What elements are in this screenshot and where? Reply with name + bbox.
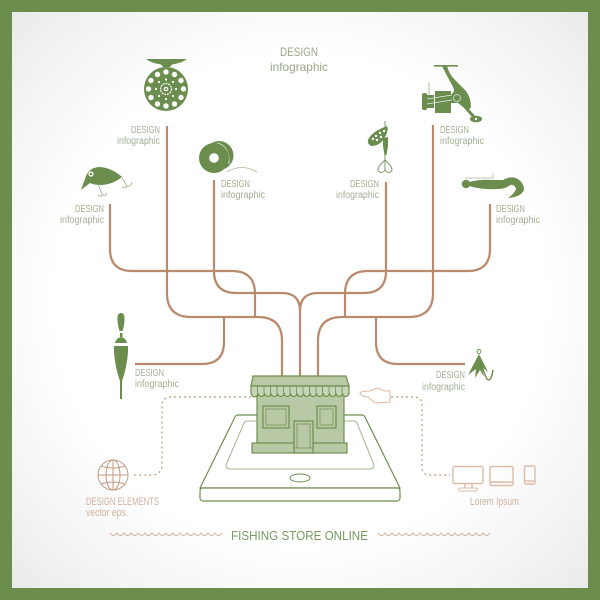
dotted connector: store to devices: [391, 397, 450, 475]
label: spinner: [336, 179, 379, 201]
icon: soft grub bait: [462, 173, 524, 198]
label: spinning reel: DESIGN: [440, 125, 469, 136]
wave divider right: [378, 533, 490, 536]
label: spinner: DESIGN: [350, 179, 379, 190]
branching connector lines: [110, 125, 490, 376]
label: design elements: vector eps.: [86, 507, 128, 519]
label: spinning reel: [440, 125, 484, 147]
label: spinner: infographic: [336, 190, 379, 201]
label: design elements: [86, 496, 159, 519]
label: lure: infographic: [60, 215, 104, 226]
label: lure: [60, 204, 104, 226]
icon: pointing hand: [360, 388, 390, 403]
label: hook: infographic: [422, 382, 465, 393]
label: lure: DESIGN: [75, 204, 104, 215]
wave divider left: [110, 533, 222, 536]
icon: fishing float: [114, 313, 128, 399]
title: design infographic: DESIGN: [280, 45, 318, 59]
label: spinning reel: infographic: [440, 136, 484, 147]
label: grub: DESIGN: [496, 204, 525, 215]
label: grub: infographic: [496, 215, 540, 226]
icon: globe: [98, 460, 128, 490]
label: grub: [496, 204, 540, 226]
icon: storefront: [251, 376, 349, 453]
icon: fly fishing reel: [144, 59, 188, 111]
label: spool: DESIGN: [221, 179, 250, 190]
label: reel: infographic: [117, 136, 160, 147]
label: hook: DESIGN: [436, 370, 465, 381]
label: design elements: DESIGN ELEMENTS: [86, 496, 159, 508]
icon: spinner lure: [368, 121, 392, 172]
title: design infographic: infographic: [270, 60, 328, 74]
label: float: [135, 368, 179, 390]
label: reel: DESIGN: [131, 125, 160, 136]
label: lorem ipsum: Lorem Ipsum: [470, 496, 519, 508]
label: float: DESIGN: [135, 368, 164, 379]
footer title: FISHING STORE ONLINE: [231, 528, 368, 543]
icon: spinning reel: [422, 65, 482, 122]
label: spool: [221, 179, 265, 201]
label: float: infographic: [135, 379, 179, 390]
icon: devices: [453, 466, 535, 491]
icon: line spool: [199, 141, 257, 173]
icon: crankbait lure: [81, 167, 132, 196]
icon: fly hook: [468, 350, 493, 380]
label: hook: [422, 370, 465, 393]
label: spool: infographic: [221, 190, 265, 201]
title: design infographic: [270, 45, 328, 74]
dotted connector: globe to store: [134, 397, 251, 475]
icon: tablet: [200, 415, 400, 501]
label: reel: [117, 125, 160, 147]
